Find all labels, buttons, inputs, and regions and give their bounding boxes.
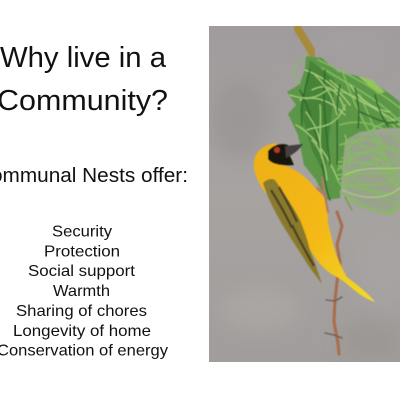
nest bbox=[287, 56, 400, 214]
bird beak bbox=[285, 144, 303, 158]
lower twig bbox=[325, 212, 342, 354]
list of benefits: Social support bbox=[28, 263, 136, 280]
title: Why live in a bbox=[0, 42, 167, 74]
photo: weaver bird on nest bbox=[209, 26, 400, 362]
list of benefits: Protection bbox=[44, 244, 120, 260]
wing feather marks bbox=[271, 187, 314, 266]
list of benefits: Security bbox=[52, 224, 112, 240]
bird black mask bbox=[268, 144, 294, 165]
nest cage tint bbox=[343, 132, 400, 211]
bird bbox=[254, 143, 375, 302]
bird body and tail bbox=[254, 143, 375, 302]
bird wing bbox=[263, 179, 322, 284]
list of benefits: Longevity of home bbox=[13, 323, 151, 340]
bird feet bbox=[317, 178, 328, 212]
title bbox=[0, 42, 168, 117]
list of benefits bbox=[0, 224, 168, 360]
upper branch bbox=[296, 26, 313, 54]
photo background bbox=[209, 26, 400, 362]
list of benefits: Conservation of energy bbox=[0, 342, 168, 360]
bird eye bbox=[274, 147, 280, 153]
nest strands bbox=[294, 56, 400, 213]
nest dense mass bbox=[287, 56, 400, 200]
list of benefits: Warmth bbox=[53, 283, 110, 300]
list of benefits: Sharing of chores bbox=[16, 303, 147, 320]
title: Community? bbox=[0, 85, 168, 117]
